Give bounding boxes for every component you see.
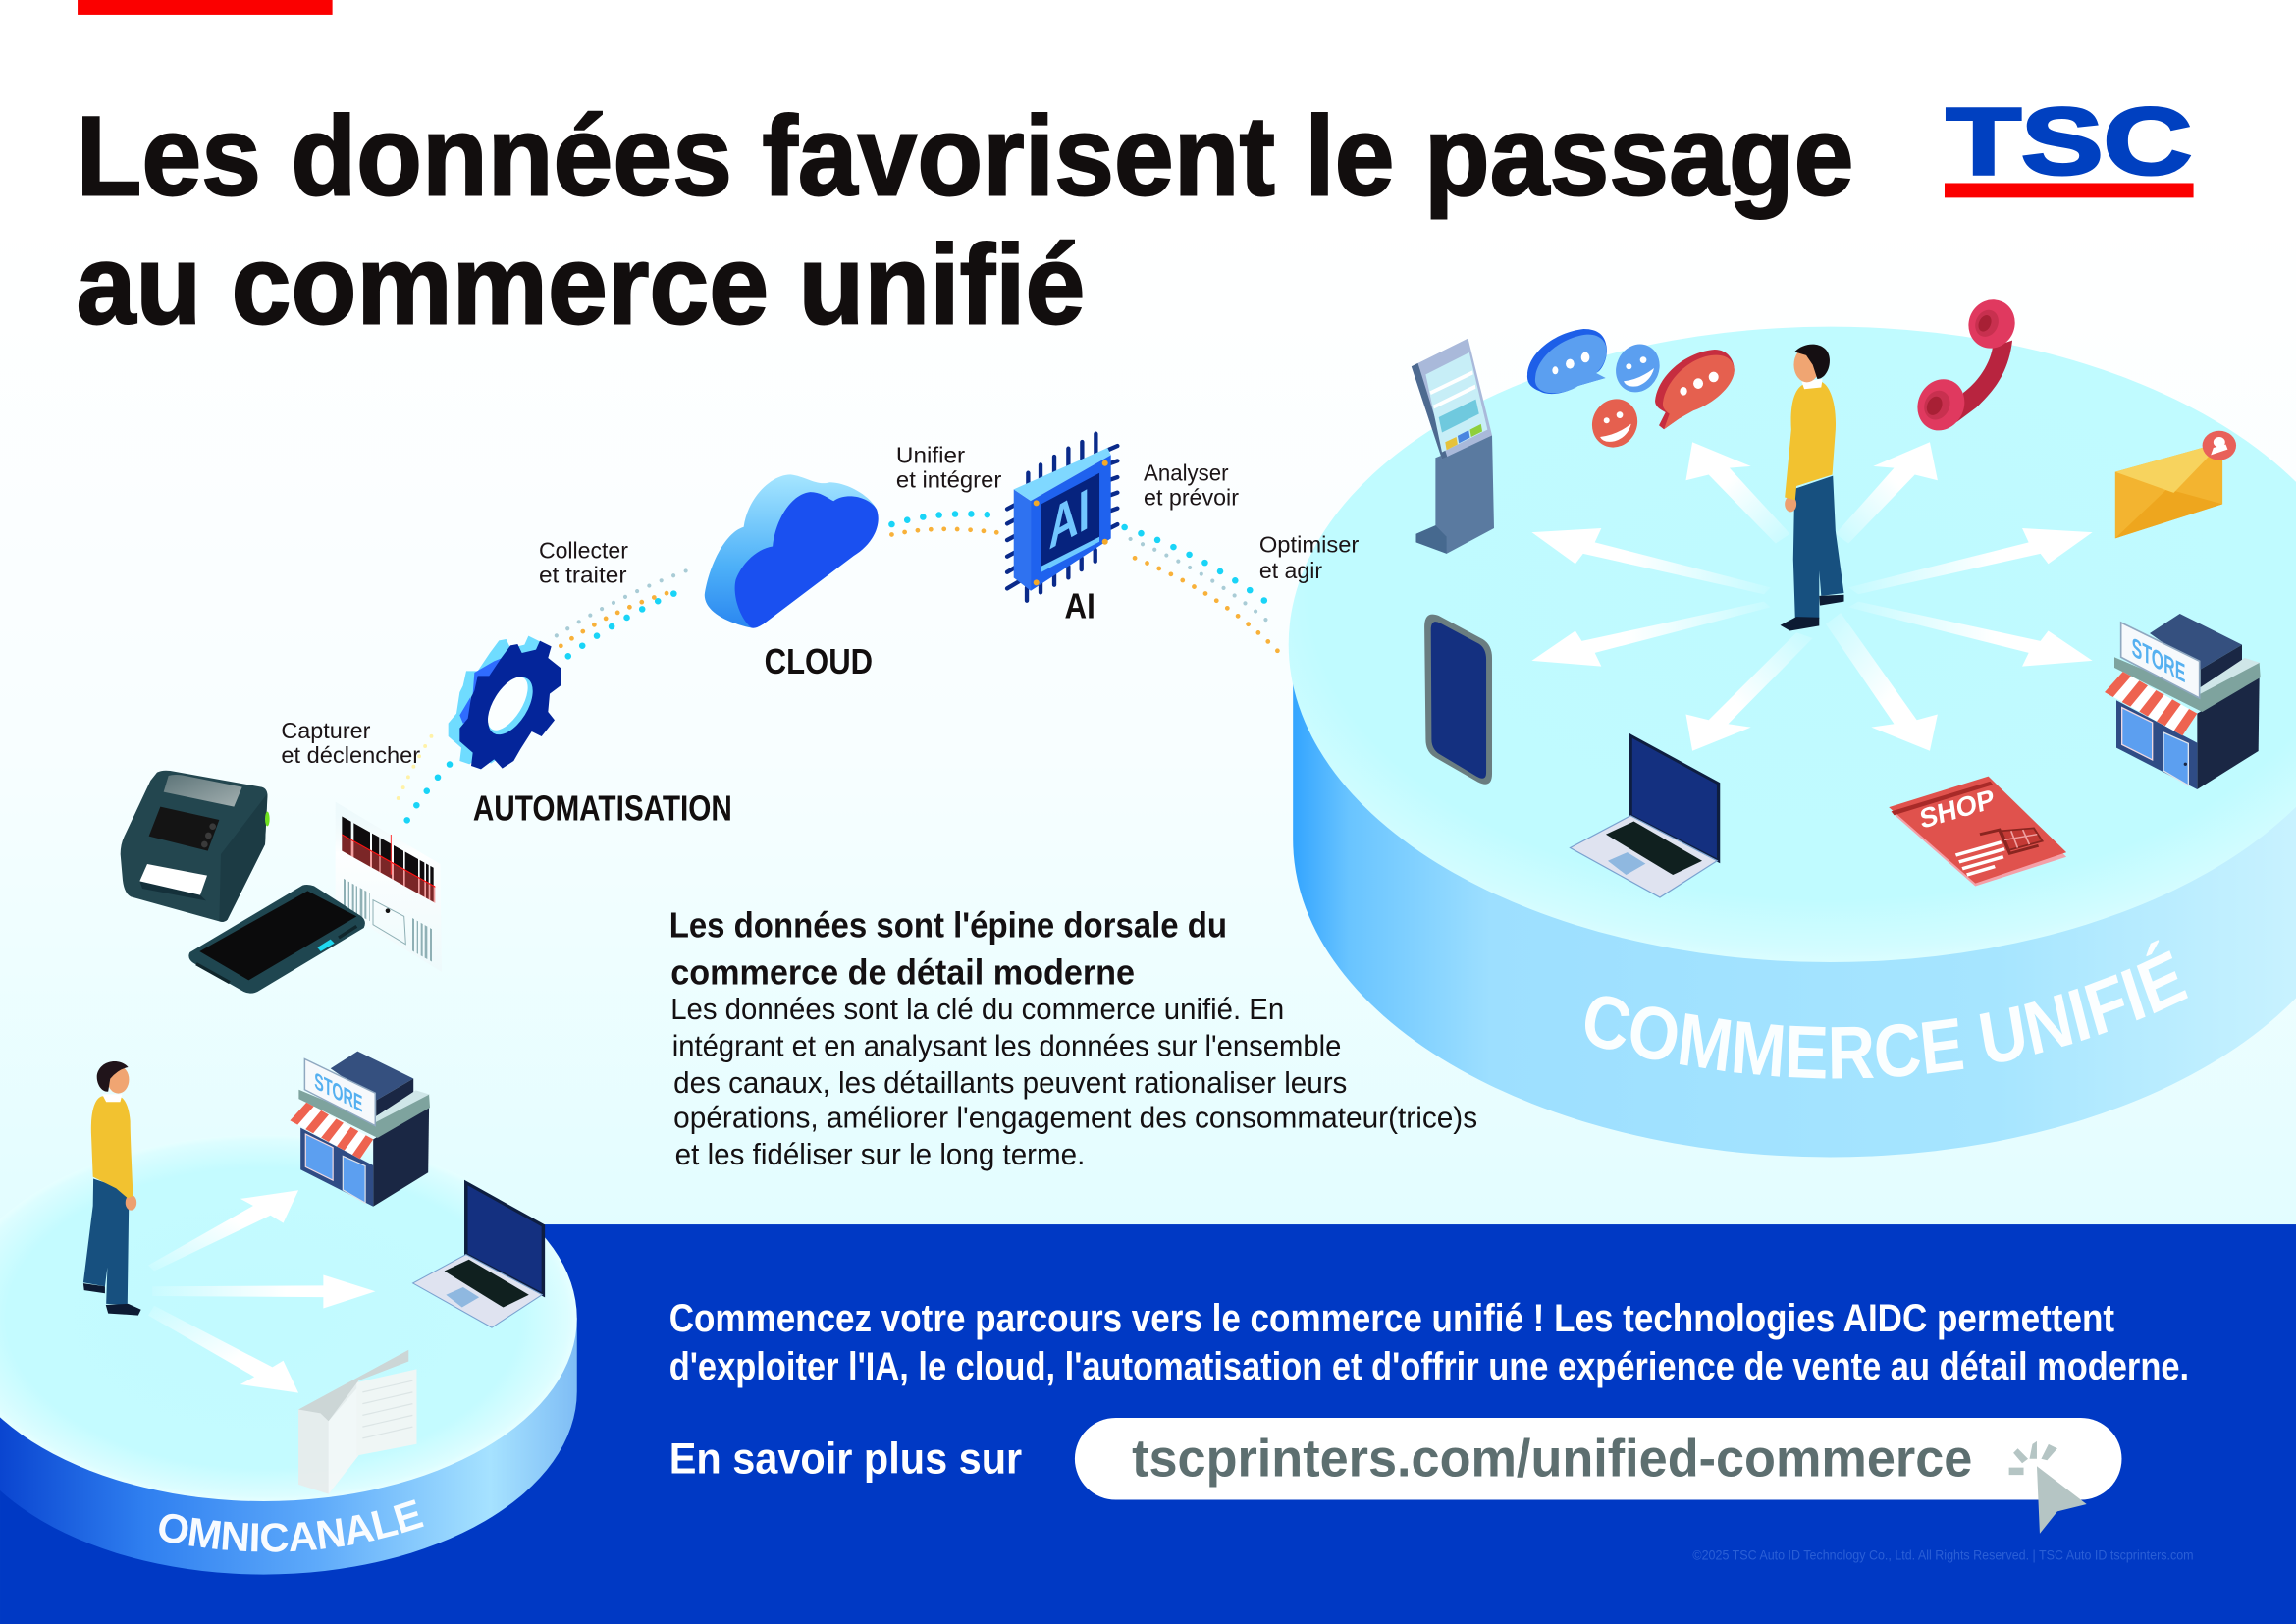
block heading [669,905,1227,992]
step label: capture: Capturer [281,718,371,743]
heading: automatisation: AUTOMATISATION [473,788,732,828]
block body [670,993,1477,1171]
step label: capture: et déclencher [281,742,420,768]
platform top [1289,327,2296,962]
icon: AI chip: AI [1048,476,1090,563]
platform side [1293,644,2296,1157]
icon: chat bubbles and smileys [1527,329,1735,455]
panel: commerce unifié platform [1288,299,2296,1157]
data path: device to automation [399,731,458,820]
icon: telephone handset [1909,292,2023,438]
block heading: commerce de détail moderne [670,951,1135,992]
step label: collect: Collecter [539,537,628,563]
icon: store: STORE [2132,631,2185,688]
icon: laptop [1571,735,1719,897]
bottom blue band [0,1224,2296,1624]
step label: analyse: Analyser [1144,460,1229,485]
copyright: ©2025 TSC Auto ID Technology Co., Ltd. All Rights Reserved. | TSC Auto ID tscprinters.com [1692,1548,2194,1564]
platform side [0,1319,577,1575]
step label: capture [281,718,420,768]
block body: et les fidéliser sur le long terme. [675,1138,1085,1171]
laptop on the omnichannel platform [413,1183,543,1327]
icon: store [2105,614,2261,789]
icon: handheld mobile computer [188,885,365,994]
block heading: Les données sont l'épine dorsale du [669,905,1227,946]
icon: barcode label [336,802,442,972]
block body: intégrant et en analysant les données sur l'ensemble [672,1030,1341,1063]
step label: analyse: et prévoir [1144,485,1239,511]
text block: data backbone [669,905,1477,1171]
icon: shop catalogue [1889,777,2066,887]
title [77,93,1854,349]
block body: Les données sont la clé du commerce unifié. En [670,993,1284,1026]
heading: cloud: CLOUD [765,642,873,681]
store on the omnichannel platform: STORE [314,1068,362,1118]
panel: omnicanale platform [0,1051,577,1575]
heading: AI: AI [1064,586,1095,625]
step label: unify [896,442,1002,493]
URL button [1075,1418,2121,1500]
traced omnichannel items [83,1061,416,1494]
data path: AI to unified commerce [1125,527,1283,656]
URL button: tscprinters.com/unified-commerce [1132,1430,1972,1489]
top red accent bar [78,0,333,15]
store on the omnichannel platform [290,1052,430,1207]
icon: AI chip [1007,434,1117,601]
icon: label printer [121,771,270,922]
step label: unify: Unifier [896,442,965,467]
data path: automation to cloud [557,567,697,656]
label: omnicanale: OMNICANALE [159,1499,424,1552]
icon: customer [1781,345,1843,631]
items drawn in traced coordinates [1412,339,2236,897]
logo: TSC: TSC [1946,87,2192,194]
icon: open catalogue [298,1350,416,1494]
step label: unify: et intégrer [896,467,1002,493]
icon: click cursor [2009,1441,2087,1534]
icon: kiosk [1412,339,1494,554]
arrows radiating from the customer [1531,442,2093,751]
title: Les données favorisent le passage [77,93,1854,219]
step label: optimise: et agir [1259,558,1322,583]
icon: cloud [705,474,879,628]
block body: opérations, améliorer l'engagement des consommateur(trice)s [673,1102,1477,1135]
call to action text: Commencez votre parcours vers le commerce unifié ! Les technologies AIDC permettent [669,1296,2114,1340]
label: commerce unifié: COMMERCE UNIFIÉ [1585,940,2188,1078]
data path: cloud to AI [891,514,1001,534]
icon: automation gear [449,636,561,769]
step label: optimise [1259,531,1360,583]
step label: analyse [1144,460,1239,511]
icon: smartphone [1424,615,1492,785]
block body: des canaux, les détaillants peuvent rationaliser leurs [673,1066,1347,1100]
icon: shop catalogue: SHOP [1918,785,1997,836]
step label: collect: et traiter [539,563,627,588]
learn more label: En savoir plus sur [669,1435,1022,1484]
call to action text [669,1296,2189,1388]
step label: optimise: Optimiser [1259,531,1360,557]
page background [0,0,2296,1230]
platform top [0,1135,577,1501]
icon: envelope with notification [2115,431,2236,538]
arrows to the three channels [148,1190,375,1393]
title: au commerce unifié [77,223,1085,349]
step label: collect [539,537,628,588]
icon: customer [83,1061,141,1316]
